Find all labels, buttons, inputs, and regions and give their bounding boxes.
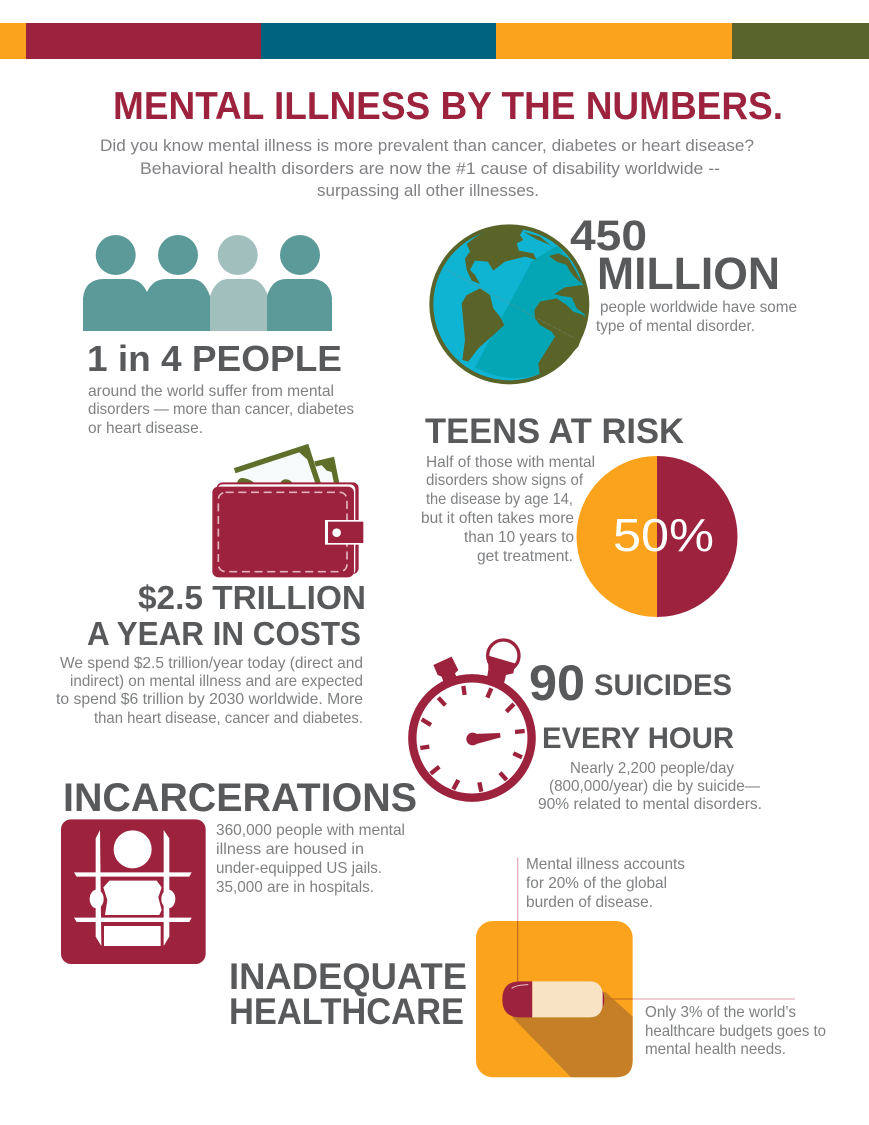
text: 450 million description — [596, 299, 797, 335]
text: teens description: than 10 years to — [464, 529, 574, 546]
text: 20% burden — [526, 856, 685, 911]
icon: four people — [83, 235, 332, 331]
heading: 450 million: 450 — [570, 212, 647, 260]
text: teens description: the disease by age 14, — [426, 491, 573, 508]
heading: 90 suicides every hour — [529, 655, 734, 755]
text: teens description: get treatment. — [477, 548, 573, 565]
heading: inadequate healthcare: HEALTHCARE — [229, 991, 464, 1032]
heading: teens at risk: TEENS AT RISK — [425, 412, 684, 451]
text: suicides description — [538, 760, 762, 813]
heading: 90 suicides every hour: 90 — [529, 655, 585, 711]
text: incarcerations description: under-equipped US jails. — [216, 860, 382, 877]
text: 1 in 4 people description: or heart disease. — [88, 420, 203, 437]
text: teens description: Half of those with mental — [426, 454, 595, 471]
top colour band — [0, 23, 869, 59]
heading: 90 suicides every hour: SUICIDES — [594, 669, 732, 702]
title: MENTAL ILLNESS BY THE NUMBERS. — [113, 85, 783, 128]
text: 20% burden: for 20% of the global — [526, 875, 667, 892]
intro paragraph: Did you know mental illness is more prevalent than cancer, diabetes or heart disease? — [100, 136, 754, 155]
text: suicides description: (800,000/year) die by suicide— — [549, 778, 760, 795]
intro paragraph: surpassing all other illnesses. — [317, 181, 539, 200]
text: suicides description: 90% related to mental disorders. — [538, 796, 762, 813]
heading: incarcerations: INCARCERATIONS — [63, 776, 417, 820]
text: incarcerations description: 35,000 are in hospitals. — [216, 879, 374, 896]
pie chart: 50% — [576, 456, 738, 617]
text: incarcerations description: 360,000 people with mental — [216, 822, 405, 839]
icon: pill with callout lines — [476, 857, 795, 1077]
text: 450 million description: type of mental disorder. — [596, 318, 755, 335]
icon: globe — [429, 224, 589, 384]
intro paragraph: Behavioral health disorders are now the #1 cause of disability worldwide -- — [140, 159, 720, 178]
text: 3% of budgets: Only 3% of the world’s — [645, 1004, 796, 1021]
text: 20% burden: burden of disease. — [526, 894, 653, 911]
text: costs description: than heart disease, cancer and diabetes. — [94, 710, 363, 727]
heading: inadequate healthcare — [229, 956, 467, 1032]
icon: person behind bars — [61, 819, 206, 964]
text: incarcerations description — [216, 822, 405, 896]
pie chart: 50%: 50% — [613, 509, 714, 561]
text: suicides description: Nearly 2,200 people/day — [570, 760, 734, 777]
heading: 450 million: MILLION — [597, 248, 780, 299]
text: 1 in 4 people description: disorders — more than cancer, diabetes — [88, 401, 354, 418]
text: costs description: to spend $6 trillion by 2030 worldwide. More — [56, 691, 363, 708]
heading: 450 million — [570, 212, 780, 299]
text: teens description: but it often takes more — [421, 510, 574, 527]
text: 1 in 4 people description — [88, 383, 354, 437]
text: 3% of budgets — [645, 1004, 826, 1058]
text: 450 million description: people worldwide have some — [600, 299, 797, 316]
text: 3% of budgets: healthcare budgets goes to — [645, 1023, 826, 1040]
text: costs description — [56, 655, 363, 727]
heading: $2.5 trillion: A YEAR IN COSTS — [87, 615, 361, 652]
heading: inadequate healthcare: INADEQUATE — [229, 956, 467, 997]
icon: wallet — [212, 444, 364, 577]
intro paragraph — [100, 136, 754, 200]
icon: stopwatch — [412, 640, 532, 798]
text: 20% burden: Mental illness accounts — [526, 856, 685, 873]
text: costs description: We spend $2.5 trillion/year today (direct and — [60, 655, 363, 672]
text: teens description — [421, 454, 595, 565]
text: incarcerations description: illness are housed in — [216, 841, 364, 858]
text: 3% of budgets: mental health needs. — [645, 1041, 786, 1058]
text: 1 in 4 people description: around the world suffer from mental — [88, 383, 334, 400]
heading: $2.5 trillion: $2.5 TRILLION — [138, 579, 366, 616]
heading: 1 in 4 people: 1 in 4 PEOPLE — [87, 338, 342, 379]
heading: $2.5 trillion — [87, 579, 366, 652]
heading: 90 suicides every hour: EVERY HOUR — [542, 722, 734, 755]
text: costs description: indirect) on mental illness and are expected — [70, 673, 363, 690]
text: teens description: disorders show signs of — [426, 472, 584, 489]
